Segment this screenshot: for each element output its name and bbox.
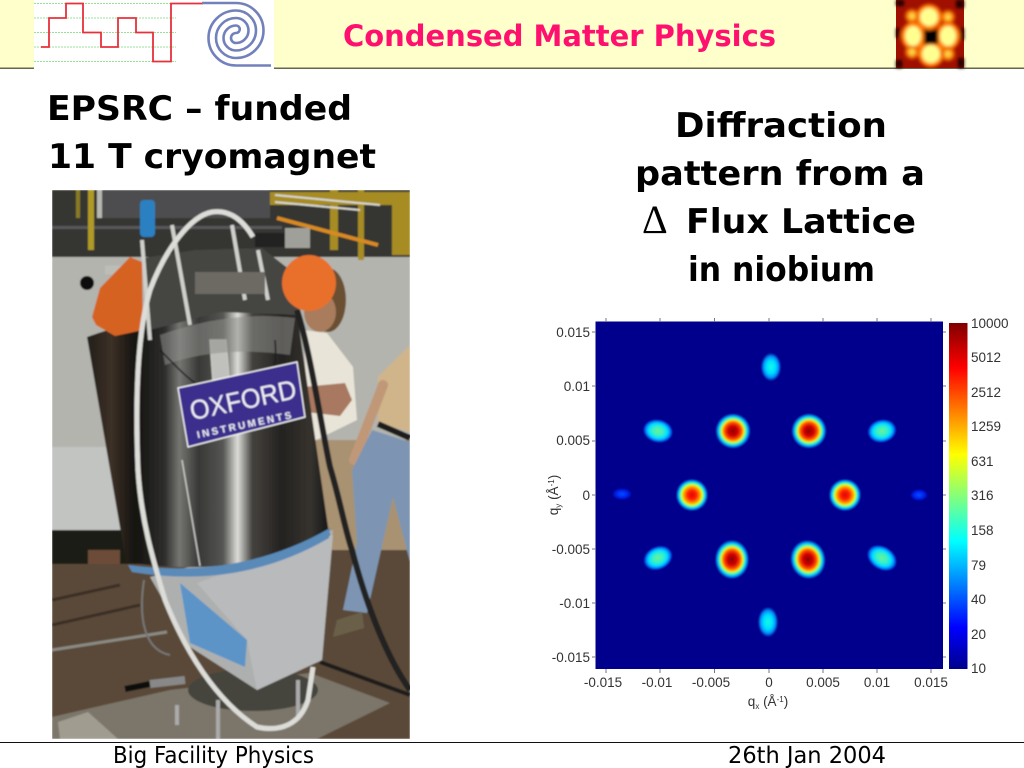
colour bar labels: 158: [971, 523, 994, 538]
y axis labels: 0.01: [564, 379, 590, 394]
x axis labels: 0.01: [864, 675, 890, 690]
right heading: Δ: [642, 197, 668, 242]
left heading: [47, 89, 376, 177]
y axis title: q: [546, 508, 561, 515]
plot area: [596, 322, 943, 669]
left heading: EPSRC – funded: [47, 89, 352, 129]
x axis labels: 0.005: [806, 675, 840, 690]
Oxford Instruments label: [178, 362, 305, 447]
thin black cable: [162, 340, 277, 383]
right heading: in niobium: [688, 250, 875, 290]
cylinder reflections: [182, 340, 230, 566]
diffraction plot: [546, 316, 1009, 711]
slide title: Condensed Matter Physics: [343, 19, 776, 53]
photo background: hall wall and floor: [52, 190, 410, 739]
orange bag: [92, 257, 143, 336]
y axis labels: -0.01: [559, 596, 590, 611]
top plumbing: [80, 200, 310, 340]
diffraction spots: [612, 353, 928, 637]
right heading: [635, 106, 925, 290]
person behind magnet: [303, 268, 357, 443]
top flange highlights: [160, 316, 295, 365]
hopper: [150, 530, 333, 690]
left heading: 11 T cryomagnet: [48, 137, 376, 177]
header band: [0, 0, 1024, 69]
colour bar labels: [971, 316, 1009, 676]
orange ball: [282, 255, 336, 311]
x axis title: (Å: [759, 694, 777, 709]
colour bar labels: 5012: [971, 350, 1001, 365]
header logo: waveform and spiral: [34, 0, 274, 70]
axis ticks: [592, 318, 946, 673]
Oxford Instruments label: INSTRUMENTS: [196, 410, 295, 441]
y axis labels: -0.015: [552, 650, 590, 665]
base plate and mount: [52, 662, 410, 739]
x axis title: ): [784, 694, 788, 709]
blue rim: [128, 528, 330, 577]
colour bar labels: 1259: [971, 419, 1001, 434]
y axis labels: 0.005: [556, 433, 590, 448]
colour bar labels: 316: [971, 488, 994, 503]
right heading: Flux Lattice: [686, 202, 916, 242]
y axis labels: 0.015: [556, 325, 590, 340]
colour bar labels: 2512: [971, 385, 1001, 400]
y axis labels: 0: [582, 488, 590, 503]
y axis title: ): [546, 475, 561, 479]
person at right: [333, 345, 410, 637]
x axis title: -1: [777, 695, 784, 704]
photo: cryomagnet: [52, 190, 410, 739]
y axis labels: -0.005: [552, 542, 590, 557]
colour bar labels: 10000: [971, 316, 1009, 331]
black cable bundle: [297, 310, 410, 690]
colour bar labels: 20: [971, 627, 986, 642]
Oxford Instruments label: OXFORD: [187, 374, 299, 426]
x axis title: q: [748, 694, 755, 709]
colour bar labels: 10: [971, 661, 986, 676]
x axis labels: 0: [765, 675, 773, 690]
colour bar: [949, 323, 968, 669]
x axis labels: -0.005: [692, 675, 730, 690]
x axis labels: [584, 675, 948, 690]
colour bar labels: 40: [971, 592, 986, 607]
white hose: [137, 212, 313, 729]
header image: heat-map of vortex core: [896, 0, 964, 68]
x axis labels: 0.015: [914, 675, 948, 690]
right heading: pattern from a: [635, 154, 925, 194]
footer rule: [0, 742, 1024, 743]
cryostat body: [87, 310, 330, 567]
y axis title: -1: [547, 479, 556, 486]
colour bar labels: 631: [971, 454, 994, 469]
x axis title: x: [755, 702, 759, 711]
colour bar labels: 79: [971, 558, 986, 573]
x axis labels: -0.01: [642, 675, 672, 690]
y axis title: (Å: [546, 486, 561, 504]
y axis title: y: [554, 504, 563, 508]
y axis labels: [552, 325, 590, 665]
right heading: Diffraction: [675, 106, 887, 146]
x axis labels: -0.015: [584, 675, 622, 690]
